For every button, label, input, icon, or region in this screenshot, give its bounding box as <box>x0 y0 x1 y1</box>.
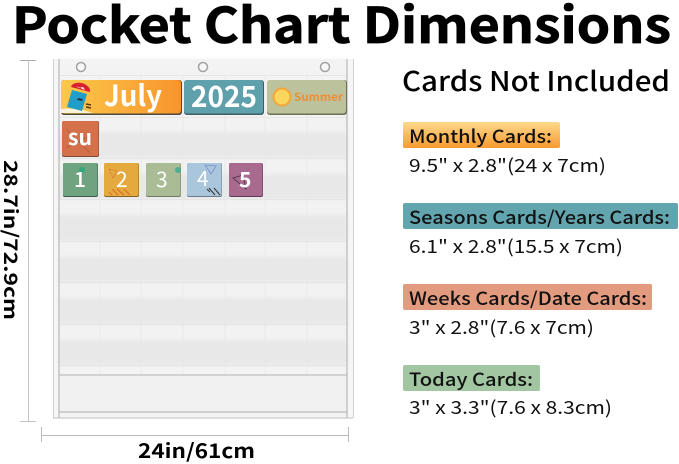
spec: weeks cards: Weeks Cards/Date Cards: <box>409 285 647 311</box>
width dimension line <box>41 427 349 442</box>
card: 2 <box>104 163 139 197</box>
chart background <box>53 59 354 418</box>
card: Summer <box>267 80 347 115</box>
spec: seasons cards <box>403 203 678 259</box>
spec: seasons cards: Seasons Cards/Years Cards: <box>409 204 670 230</box>
card: 4 <box>187 163 222 197</box>
spec: seasons cards: 6.1" x 2.8"(15.5 x 7cm) <box>409 233 623 259</box>
heading: cards not included: Cards Not Included <box>402 60 670 99</box>
pocket rows <box>59 59 347 418</box>
spec: today cards <box>403 365 612 420</box>
icon: sun <box>272 88 292 106</box>
height dimension line <box>20 60 36 422</box>
card: July: July <box>104 73 162 115</box>
card: July <box>61 73 182 115</box>
card: 3: 3 <box>156 164 168 194</box>
grommets <box>76 62 330 72</box>
card: 1 <box>63 163 98 197</box>
card: su <box>62 121 99 157</box>
spec: today cards: Today Cards: <box>409 366 533 392</box>
spec: today cards: 3" x 3.3"(7.6 x 8.3cm) <box>409 394 612 420</box>
card: su: su <box>68 122 92 152</box>
card: 1: 1 <box>74 164 86 194</box>
icon: beach towel and umbrella <box>61 83 93 113</box>
card: 3 <box>146 163 181 197</box>
width label: 24in/61cm <box>138 435 255 464</box>
pocket chart <box>53 59 354 418</box>
spec: monthly cards: 9.5" x 2.8"(24 x 7cm) <box>409 152 606 178</box>
spec: weeks cards: 3" x 2.8"(7.6 x 7cm) <box>409 314 594 340</box>
spec: monthly cards: Monthly Cards: <box>409 123 552 149</box>
card: 4: 4 <box>197 163 209 193</box>
spec: weeks cards <box>403 284 652 340</box>
card: Summer: Summer <box>294 89 343 105</box>
spec: monthly cards <box>403 122 606 178</box>
card: 5: 5 <box>239 164 251 194</box>
card: 2: 2 <box>116 164 128 194</box>
frame lines <box>53 59 354 418</box>
card: 5 <box>229 163 263 197</box>
card: 2025: 2025 <box>191 74 257 116</box>
